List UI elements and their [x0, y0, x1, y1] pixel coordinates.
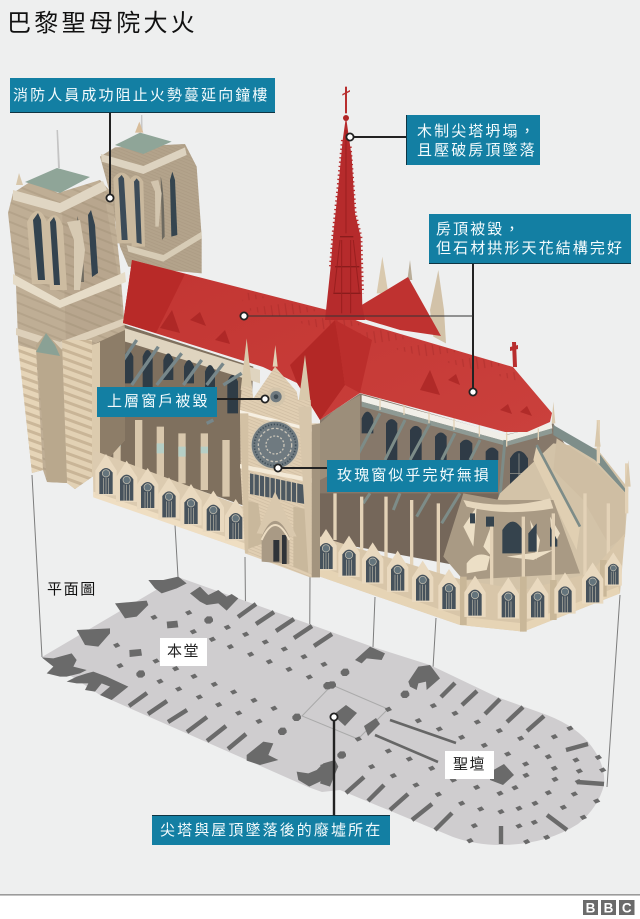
north transept roof — [360, 277, 441, 336]
callout: bell towers saved — [10, 78, 275, 113]
leader: roof — [240, 263, 477, 396]
callout: upper windows — [97, 387, 217, 417]
floor plan — [42, 577, 606, 845]
label: sanctuary: 聖壇 — [453, 756, 486, 773]
plan north transept end — [320, 647, 440, 787]
east spires behind transept — [377, 257, 446, 343]
label: floor plan: 平面圖 — [47, 581, 97, 598]
plan floor slab — [42, 577, 604, 845]
plan piers east — [327, 669, 606, 844]
rose window — [251, 421, 299, 469]
plan chancel walls and crossing — [302, 685, 456, 762]
tower buttress stones — [62, 340, 92, 489]
callout: rose window — [327, 460, 498, 492]
label: nave — [160, 638, 207, 666]
nave aisle with windows — [93, 450, 247, 553]
callout: bell towers saved: 消防人員成功阻止火勢蔓延向鐘樓 — [13, 87, 270, 104]
plan piers west — [113, 610, 332, 735]
spire — [325, 87, 365, 320]
BBC logo: B — [586, 900, 596, 916]
front tower — [8, 130, 127, 489]
callout: spire collapsed: 且壓破房頂墜落 — [417, 142, 537, 159]
rear tower — [100, 115, 202, 273]
callout: debris: 尖塔與屋頂墜落後的廢墟所在 — [160, 822, 382, 839]
tower roof and spike — [25, 168, 90, 193]
callout: debris — [152, 815, 390, 845]
label: nave: 本堂 — [167, 643, 200, 660]
tower string course — [13, 272, 126, 308]
support lines from cathedral to floor plan — [32, 475, 620, 787]
plan west towers and transept ends — [42, 577, 338, 787]
leader: rose window — [274, 464, 327, 472]
apse and ambulatory — [315, 402, 631, 632]
callout: upper windows: 上層窗戶被毀 — [107, 393, 210, 410]
nave upper wall and flying buttresses — [93, 323, 260, 507]
BBC logo: C — [622, 900, 632, 916]
callout: spire collapsed — [406, 115, 540, 165]
label: sanctuary — [445, 751, 494, 779]
title: 巴黎聖母院大火 — [7, 10, 198, 37]
plan buttress bars — [129, 604, 604, 844]
callout: spire collapsed: 木制尖塔坍塌， — [417, 123, 537, 140]
tower windows — [27, 211, 51, 284]
south transept facade — [240, 338, 360, 577]
leader: spire — [346, 133, 406, 141]
choir wall and flying buttresses — [320, 393, 578, 573]
callout: rose window: 玫瑰窗似乎完好無損 — [337, 467, 491, 484]
BBC logo — [583, 900, 634, 916]
east gable cross — [510, 342, 518, 367]
cathedral 3D model — [8, 87, 631, 815]
footer rule — [0, 894, 640, 896]
callout: roof destroyed: 房頂被毀， — [436, 221, 522, 238]
red roof — [123, 260, 552, 432]
leader: upper windows — [217, 395, 269, 403]
callout: roof destroyed: 但石材拱形天花結構完好 — [436, 240, 624, 257]
leader: bell tower — [106, 113, 114, 202]
leader: debris location — [330, 713, 338, 815]
callout: roof destroyed — [429, 214, 631, 264]
small upper rose — [267, 387, 285, 406]
BBC logo: B — [604, 900, 614, 916]
